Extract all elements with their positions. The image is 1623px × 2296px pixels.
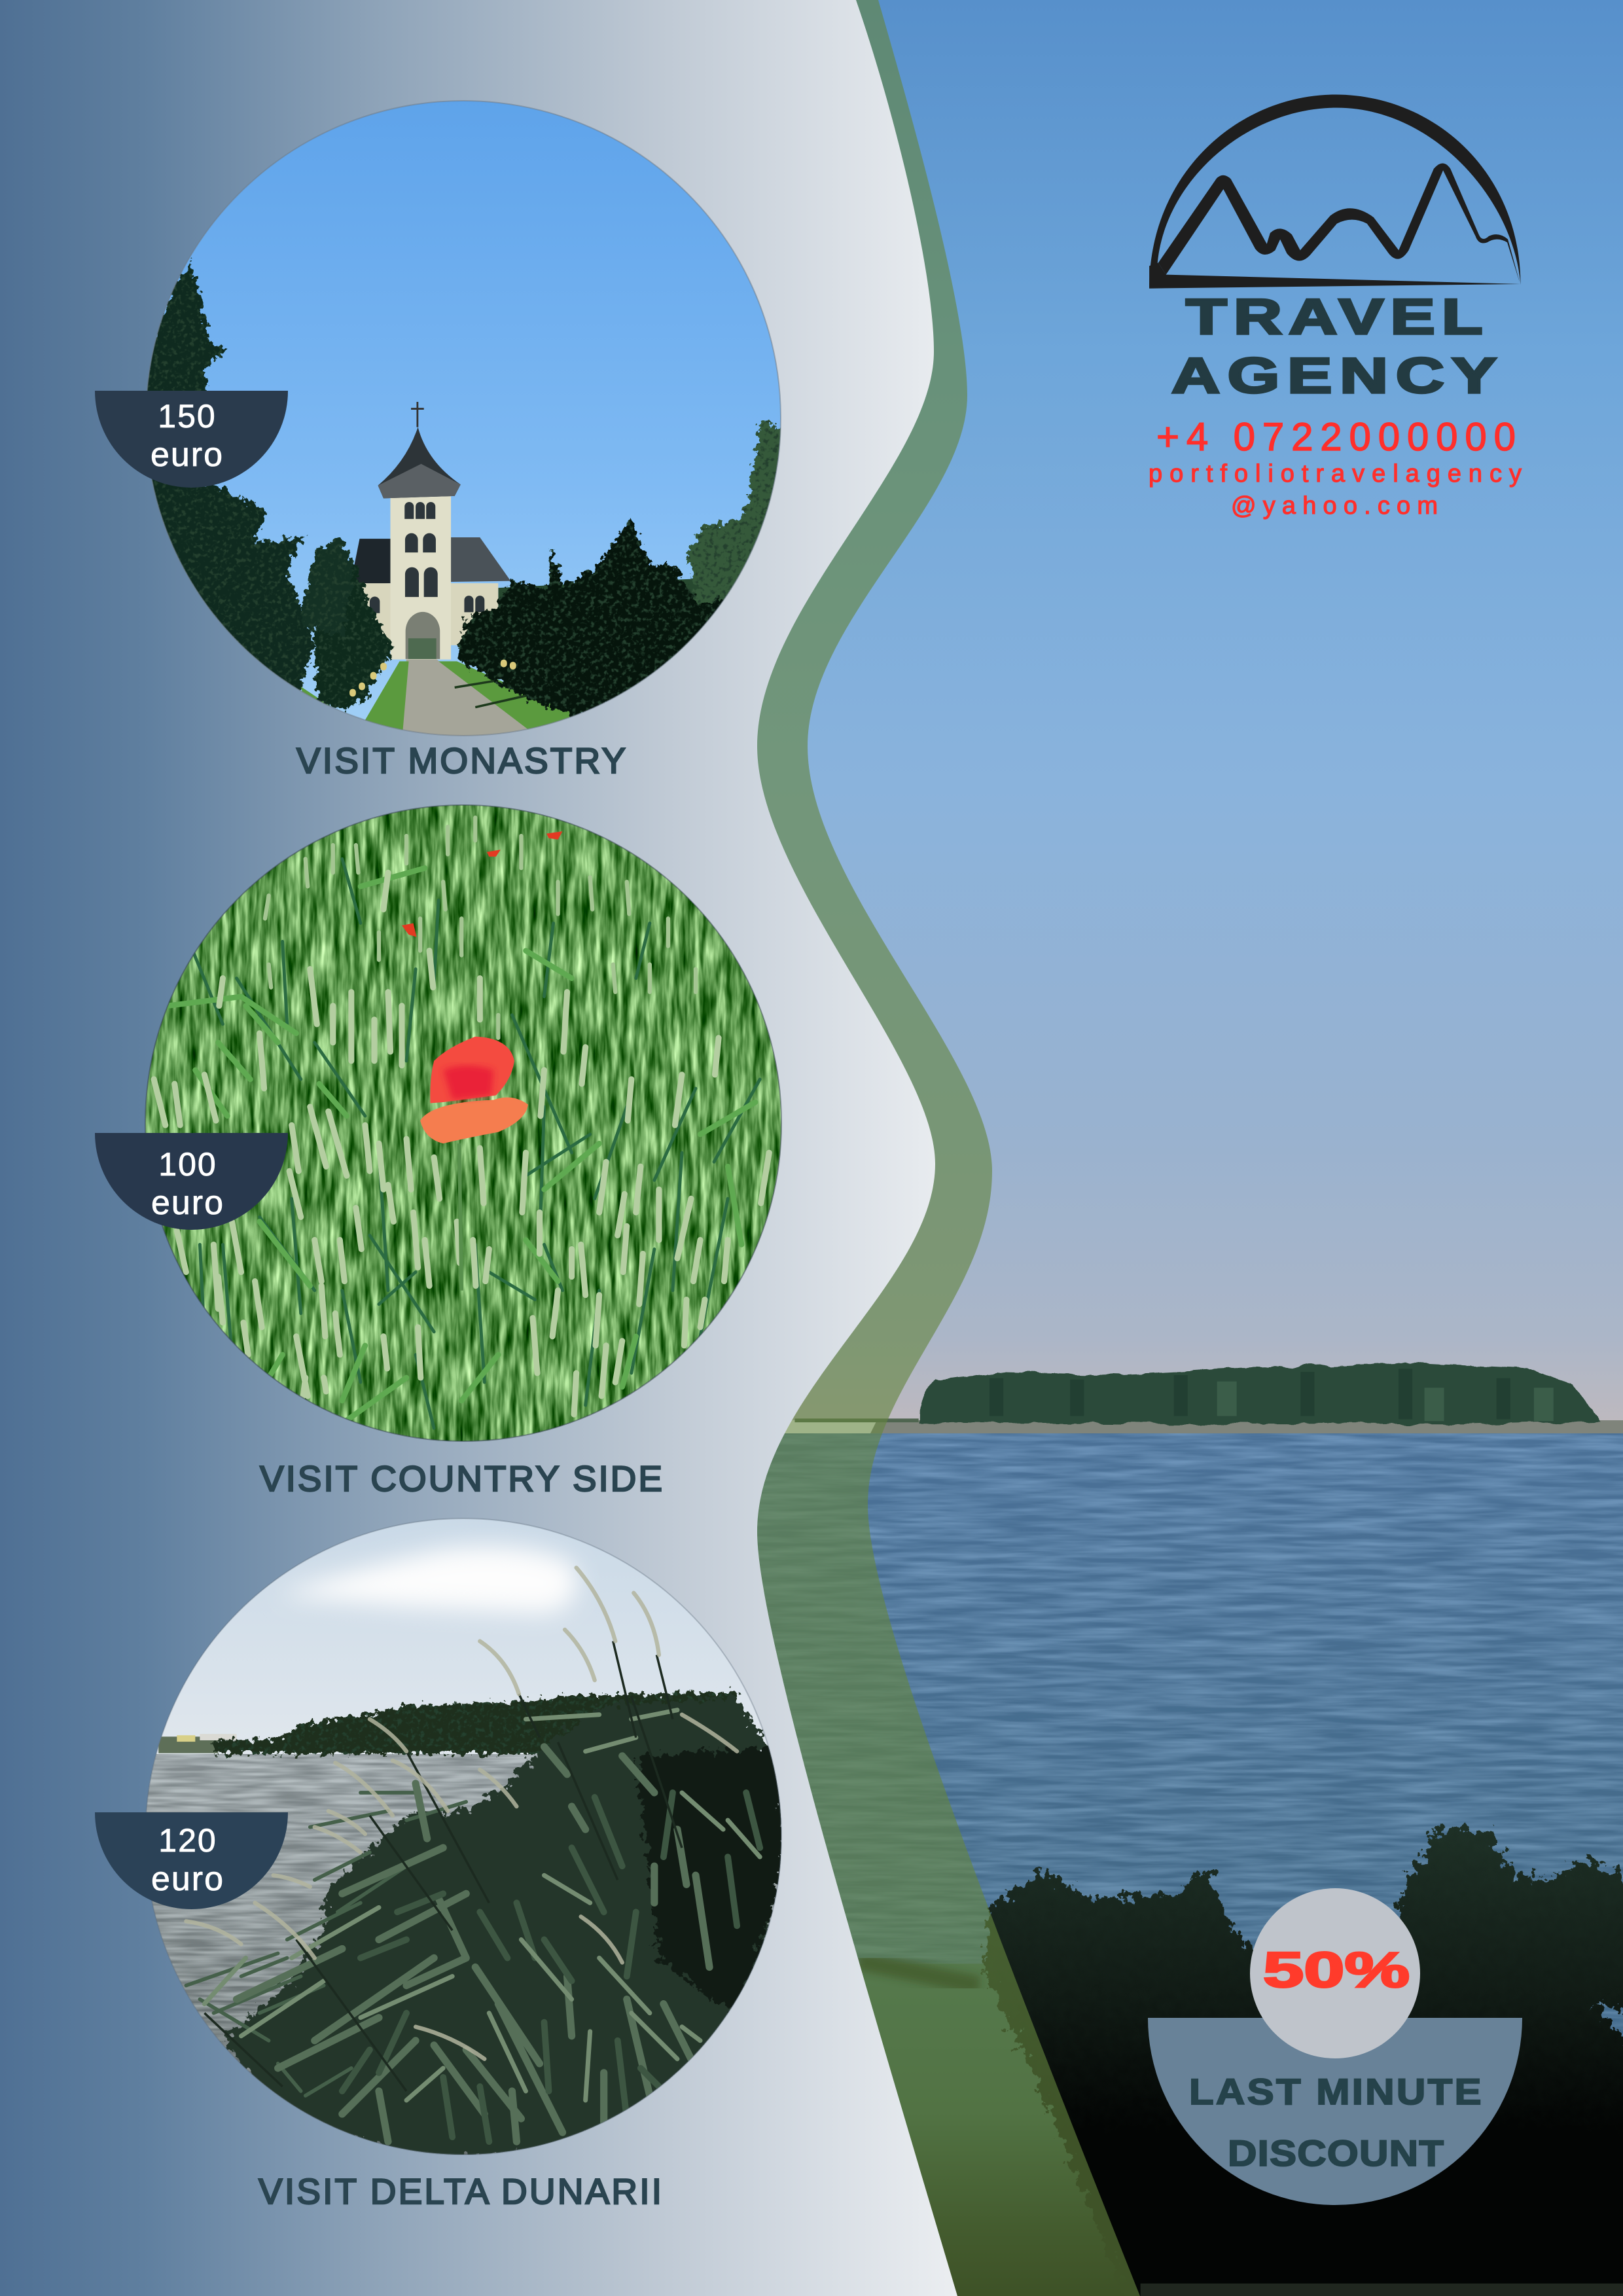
monastery sky	[144, 98, 785, 740]
half circle	[1148, 2018, 1522, 2205]
price badge: 150 euro	[95, 391, 288, 488]
central tree left of gate	[315, 545, 393, 709]
50 percent: 50%	[1263, 1943, 1410, 1998]
right tree mass	[457, 519, 737, 719]
agency name: TRAVEL	[1186, 289, 1483, 345]
shore strip	[870, 1420, 1623, 1433]
green translucent wave band	[654, 0, 1140, 2296]
grass strips	[301, 661, 577, 730]
upper petals	[430, 1037, 514, 1103]
delta water	[144, 1754, 785, 2160]
island with trees	[794, 1363, 1601, 1425]
circle outline	[145, 1518, 781, 2155]
thin blades over the water	[186, 1793, 466, 2096]
price badge: 120 euro: 120	[158, 1822, 217, 1859]
poppy stem	[459, 1143, 461, 1291]
big poppy	[420, 1037, 528, 1143]
lamps	[353, 662, 513, 693]
field base texture	[144, 802, 785, 1444]
tower roof	[378, 427, 461, 498]
agency name	[1171, 289, 1497, 404]
distant hills	[498, 579, 751, 659]
photo circle: monastery	[126, 98, 787, 742]
side walls	[353, 583, 498, 645]
left gradient panel	[0, 0, 957, 2296]
windows	[370, 502, 484, 613]
phone number: +4 0722000000	[1156, 415, 1516, 459]
discount badge	[1148, 1888, 1522, 2205]
last minute discount: LAST MINUTE	[1189, 2072, 1482, 2112]
reed plumes	[186, 1568, 737, 2059]
caption: visit delta dunarii: VISIT DELTA DUNARII	[259, 2171, 662, 2212]
green reed leaves	[236, 1747, 709, 2142]
background photo: lake and island	[654, 0, 1623, 2296]
price badge: 120 euro	[95, 1812, 288, 1909]
reed mass	[223, 1696, 783, 2155]
lower petal	[420, 1098, 528, 1143]
price badge: 150 euro: euro	[151, 436, 224, 474]
background fir left of church	[301, 537, 353, 636]
email address	[1149, 460, 1522, 520]
bright leaves	[168, 868, 755, 1424]
road shadow	[455, 681, 526, 708]
gate arch	[406, 612, 440, 659]
logo: mountain dome	[1149, 95, 1520, 289]
caption: visit monastry: VISIT MONASTRY	[296, 740, 626, 781]
circle outline	[145, 805, 781, 1441]
tower body	[390, 487, 451, 660]
far tree line	[213, 1692, 741, 1755]
circle outline	[146, 101, 781, 736]
dark foreground bushes	[858, 1828, 1623, 2296]
dark stems	[204, 1641, 682, 2091]
price badge: 100 euro: euro	[151, 1184, 224, 1222]
email address: portfoliotravelagency	[1149, 460, 1522, 488]
photo circle: Danube delta reeds	[144, 1515, 785, 2160]
email address: @yahoo.com	[1231, 492, 1438, 520]
last minute discount: DISCOUNT	[1228, 2134, 1444, 2174]
far shore buildings	[158, 1734, 236, 1753]
small ears top	[265, 817, 696, 1038]
clouds	[278, 1547, 577, 1613]
last minute discount	[1189, 2072, 1482, 2174]
wheat ears pale	[154, 872, 769, 1414]
price badge: 120 euro: euro	[151, 1860, 224, 1898]
agency name: AGENCY	[1171, 348, 1497, 404]
upper right leafy tree	[687, 420, 787, 613]
dark reeds right	[636, 1747, 783, 2018]
circle	[1250, 1888, 1420, 2058]
small red poppies	[402, 831, 563, 937]
delta sky	[144, 1515, 785, 1790]
price badge: 150 euro: 150	[158, 398, 217, 435]
dark blades	[181, 859, 760, 1428]
left tree mass	[147, 258, 317, 692]
sky	[654, 0, 1623, 1420]
gate road	[401, 660, 527, 736]
caption: visit country side: VISIT COUNTRY SIDE	[260, 1458, 662, 1499]
photo circle: poppy in wheat field	[144, 802, 785, 1444]
water	[654, 1433, 1623, 2296]
cross	[411, 402, 424, 427]
price badge: 100 euro: 100	[158, 1146, 217, 1183]
darker shallow water behind the band	[794, 1964, 1164, 2296]
side roofs	[350, 539, 392, 584]
church	[350, 402, 510, 660]
price badge: 100 euro	[95, 1133, 288, 1230]
